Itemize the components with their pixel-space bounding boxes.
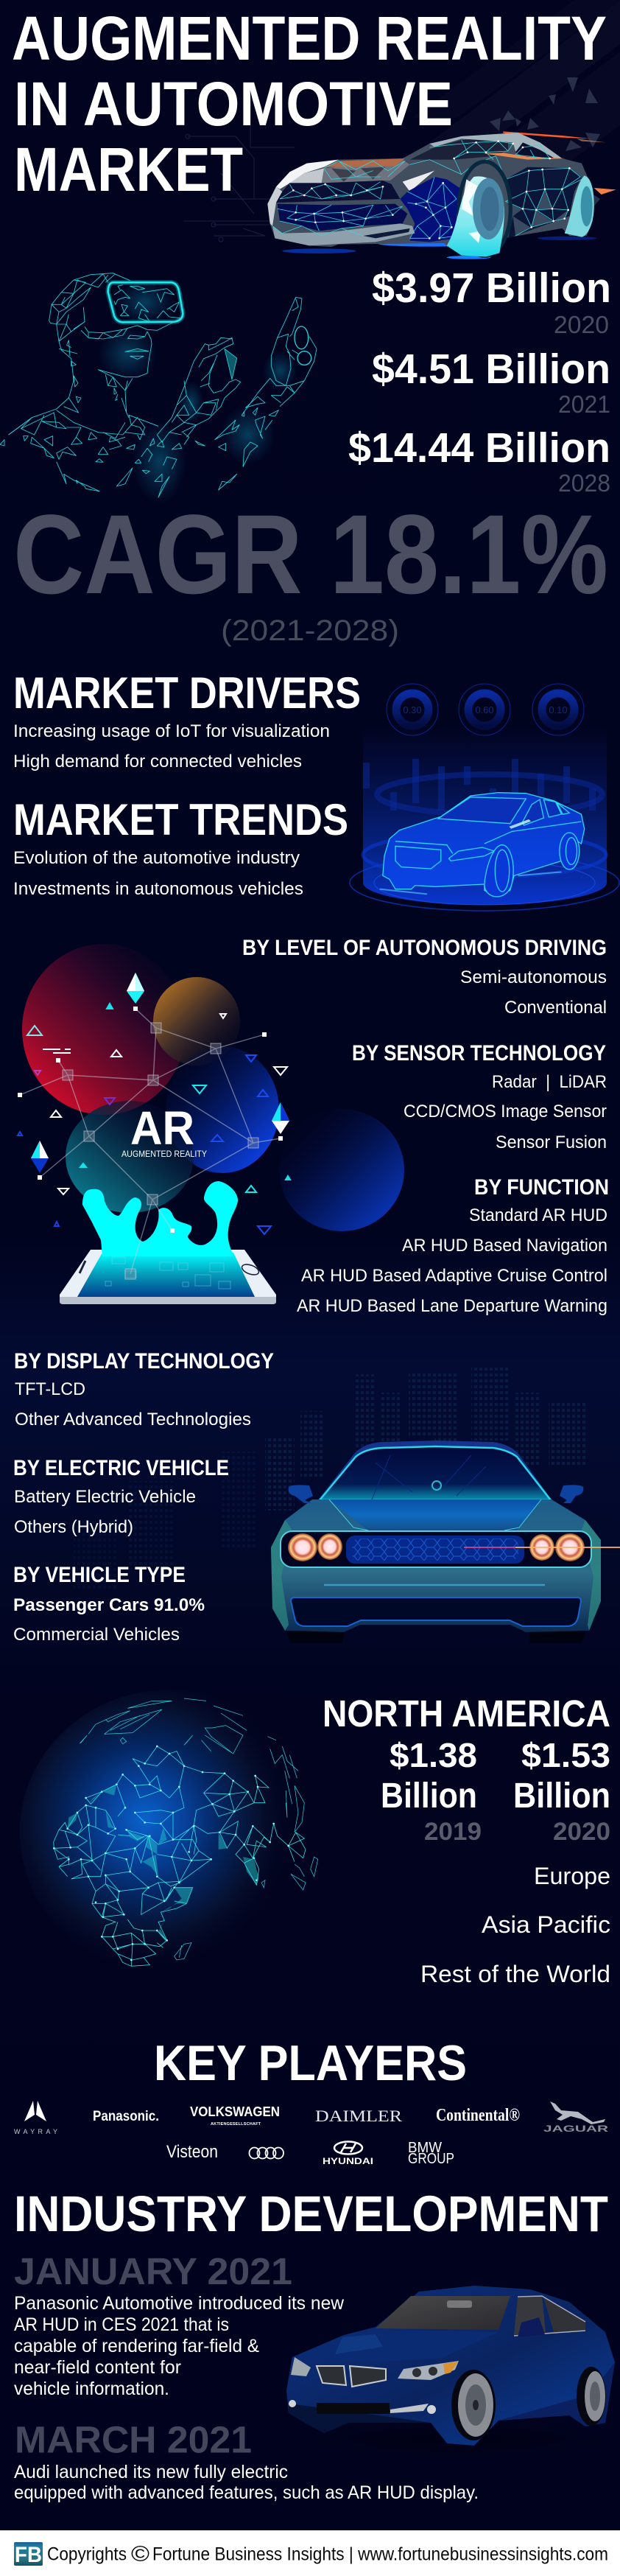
logo: Jaguar — [543, 2101, 609, 2134]
regional data: North America: Billion — [381, 1777, 477, 1816]
logo: Volkswagen: AKTIENGESELLSCHAFT — [211, 2122, 261, 2127]
dark upper grille — [276, 181, 400, 203]
regional data: North America: Billion — [513, 1777, 610, 1816]
liquid splash — [82, 1181, 238, 1256]
door side — [506, 167, 582, 238]
segment: sensor technology — [352, 1041, 607, 1152]
title: MARKET — [14, 135, 243, 204]
phone — [60, 1250, 276, 1304]
northern and eastern rim mesh — [80, 1698, 318, 1960]
market trends — [13, 795, 348, 899]
illustration: holographic blue car — [350, 684, 619, 911]
lower air intake — [278, 204, 407, 231]
floating triangles — [18, 1004, 290, 1234]
illustration: wireframe sports car — [267, 131, 616, 259]
phone screen UI tiles — [105, 1257, 230, 1289]
windscreen and roof facets — [410, 136, 508, 160]
segment: display technology — [14, 1349, 274, 1429]
lower intake — [291, 1597, 581, 1626]
windshield — [320, 1446, 551, 1500]
segment: vehicle type: Passenger Cars 91.0% — [13, 1595, 205, 1615]
market size: 2021 — [372, 346, 610, 418]
lights band — [281, 1531, 591, 1567]
market drivers — [13, 668, 361, 771]
logo: WayRay — [14, 2101, 57, 2135]
development: March 2021: Audi launched its new fully electric — [14, 2462, 288, 2482]
network nodes — [63, 1023, 258, 1279]
segment: vehicle type: Commercial Vehicles — [13, 1625, 180, 1645]
road glow — [282, 237, 596, 259]
segment: level of autonomous driving — [242, 936, 607, 1018]
dashboard dials — [387, 684, 584, 735]
market size: 2028: 2028 — [558, 469, 610, 497]
development: January 2021: Panasonic Automotive introduced its new — [14, 2293, 345, 2314]
key player logos — [14, 2101, 609, 2167]
front bumper — [272, 223, 415, 245]
segment: electric vehicle: Battery Electric Vehicle — [14, 1487, 196, 1507]
illustration: person wearing VR headset — [0, 273, 317, 503]
VR headset — [108, 282, 183, 322]
logo: Hyundai — [323, 2141, 373, 2166]
copyright text: Copyrights — [47, 2544, 127, 2564]
left hand with crystal — [157, 337, 241, 437]
title — [12, 4, 607, 204]
illustration: AR smartphone with network — [18, 944, 404, 1304]
market size: 2028 — [348, 424, 610, 497]
development: January 2021: AR HUD in CES 2021 that is — [14, 2314, 229, 2335]
regional data: North America: $1.53 — [521, 1736, 610, 1774]
headset strap — [81, 318, 182, 339]
front wheel — [447, 161, 510, 256]
chest mesh — [0, 410, 158, 491]
market size: 2021: $4.51 Billion — [372, 346, 610, 393]
dashboard dials: 0.60 — [475, 704, 494, 715]
development: January 2021 — [14, 2250, 345, 2399]
motion streaks — [503, 131, 591, 139]
car silhouette — [380, 793, 585, 897]
development: March 2021: equipped with advanced features, such as AR HUD display. — [14, 2482, 479, 2503]
footer logo: FB — [15, 2543, 42, 2567]
illustration: front view of teal car — [271, 1441, 620, 1643]
mesh nodes — [293, 141, 569, 238]
logo: BMW Group — [408, 2140, 454, 2167]
segment: display technology: TFT-LCD — [15, 1379, 85, 1399]
regional list — [420, 1863, 610, 1987]
segment: sensor technology: CCD/CMOS Image Sensor — [404, 1102, 607, 1121]
market size: 2020: 2020 — [554, 311, 609, 338]
background: city skyline — [74, 1367, 585, 1592]
segment: function: AR HUD Based Lane Departure Warning — [297, 1296, 607, 1316]
segment: level of autonomous driving: Semi-autonomous — [460, 967, 607, 987]
AR wordmark: AR — [130, 1102, 194, 1155]
market drivers: Increasing usage of IoT for visualization — [13, 721, 330, 741]
illustration: blue sedan — [286, 2286, 615, 2457]
head dome mesh — [49, 273, 130, 341]
logo: Visteon: Visteon — [166, 2142, 218, 2162]
neck and shoulder outline — [9, 340, 81, 435]
segment: function: AR HUD Based Adaptive Cruise Control — [301, 1266, 607, 1286]
segment: function: AR HUD Based Navigation — [402, 1236, 607, 1256]
AR wordmark: AUGMENTED REALITY — [121, 1149, 207, 1159]
segment: vehicle type — [13, 1563, 205, 1645]
copyright text: © — [131, 2542, 149, 2566]
background: circuit lines — [184, 125, 295, 242]
development: March 2021: MARCH 2021 — [15, 2418, 252, 2461]
tyres — [280, 1614, 593, 1643]
soft glows — [98, 280, 297, 503]
left forearm fragments — [116, 433, 205, 497]
filled land facets — [68, 1785, 259, 1940]
colour orbs — [22, 944, 404, 1231]
market trends: Evolution of the automotive industry — [13, 848, 300, 868]
market size: 2021: 2021 — [558, 391, 610, 418]
segment: display technology: Other Advanced Technologies — [15, 1410, 251, 1429]
dashboard dials: 0.30 — [403, 704, 422, 715]
logo: Volkswagen — [190, 2104, 280, 2127]
car body — [271, 1499, 601, 1632]
segment: vehicle type: BY VEHICLE TYPE — [13, 1563, 186, 1587]
market trends: MARKET TRENDS — [13, 795, 348, 844]
holo rings — [350, 774, 619, 911]
background: diagonal light beams and debris — [295, 0, 620, 243]
development: January 2021: vehicle information. — [14, 2379, 169, 2399]
logo: Panasonic: Panasonic. — [93, 2109, 159, 2124]
segment: sensor technology: Radar | LiDAR — [492, 1072, 607, 1092]
regional data: North America: $1.38 — [390, 1736, 477, 1774]
grille — [346, 1536, 524, 1564]
segment: level of autonomous driving: Conventional — [504, 998, 607, 1018]
title: IN AUTOMOTIVE — [14, 69, 453, 139]
logo: BMW Group: BMW — [408, 2140, 442, 2156]
copyright text — [47, 2542, 608, 2566]
market size: 2020 — [372, 265, 611, 338]
regional list: Asia Pacific — [482, 1911, 610, 1938]
development: January 2021: JANUARY 2021 — [14, 2250, 292, 2292]
CAGR figure: (2021-2028) — [221, 615, 399, 647]
face outline — [98, 332, 152, 377]
light ray — [464, 1547, 620, 1548]
development: January 2021: near-field content for — [14, 2357, 181, 2378]
logo: WayRay: WAYRAY — [14, 2128, 57, 2135]
dashboard dials: 0.10 — [549, 704, 568, 715]
heading: key players: KEY PLAYERS — [154, 2035, 467, 2091]
continent mesh — [54, 1746, 306, 1966]
logo: Hyundai: HYUNDAI — [323, 2156, 373, 2166]
regional list: Europe — [534, 1863, 610, 1889]
logo: Jaguar: JAGUAR — [543, 2124, 609, 2134]
car roof — [317, 1441, 553, 1502]
segment: function — [297, 1175, 609, 1316]
regional data: North America: 2020 — [553, 1818, 610, 1846]
footer bar — [0, 2530, 620, 2576]
development: March 2021 — [14, 2418, 479, 2503]
globe glow — [20, 1690, 319, 1975]
illustration: wireframe globe — [20, 1690, 319, 1975]
segment: electric vehicle — [13, 1456, 229, 1537]
logo: Volkswagen: VOLKSWAGEN — [190, 2104, 280, 2119]
development: January 2021: capable of rendering far-field & — [14, 2336, 259, 2356]
car base — [267, 133, 593, 256]
highlights — [276, 160, 339, 189]
segment: electric vehicle: Others (Hybrid) — [14, 1517, 133, 1537]
rear wheel — [565, 175, 594, 237]
mesh lines — [272, 140, 582, 238]
data bars — [363, 759, 596, 814]
regional data: North America — [323, 1693, 610, 1846]
crystals — [31, 973, 289, 1173]
mirrors — [289, 1485, 583, 1503]
right forearm fragments — [215, 396, 278, 490]
front fender — [400, 177, 462, 242]
headlights — [288, 1533, 585, 1561]
bonnet facets — [302, 160, 410, 183]
segment: display technology: BY DISPLAY TECHNOLOGY — [14, 1349, 274, 1373]
hood — [329, 1499, 541, 1530]
logo: Continental: Continental® — [436, 2106, 520, 2125]
bumper highlight — [324, 1584, 545, 1586]
neck front mesh — [98, 370, 133, 413]
logo: Audi rings — [249, 2147, 283, 2159]
segment: electric vehicle: BY ELECTRIC VEHICLE — [13, 1456, 229, 1480]
right pointing hand — [242, 297, 317, 415]
light cylinder — [363, 726, 607, 905]
market drivers: MARKET DRIVERS — [13, 668, 361, 718]
network lines — [20, 1009, 281, 1274]
market size: 2020: $3.97 Billion — [372, 265, 611, 312]
logo: BMW Group: GROUP — [408, 2151, 454, 2167]
market size: 2028: $14.44 Billion — [348, 424, 610, 472]
mesh nodes — [54, 1746, 289, 1960]
regional data: North America: 2019 — [424, 1818, 482, 1846]
market trends: Investments in autonomous vehicles — [13, 879, 303, 899]
logo: Daimler: DAIMLER — [315, 2107, 402, 2125]
segment: sensor technology: Sensor Fusion — [496, 1133, 607, 1152]
regional list: Rest of the World — [420, 1961, 610, 1987]
segment: function: Standard AR HUD — [469, 1205, 607, 1225]
dash marks — [43, 1049, 71, 1053]
market drivers: High demand for connected vehicles — [13, 752, 302, 771]
